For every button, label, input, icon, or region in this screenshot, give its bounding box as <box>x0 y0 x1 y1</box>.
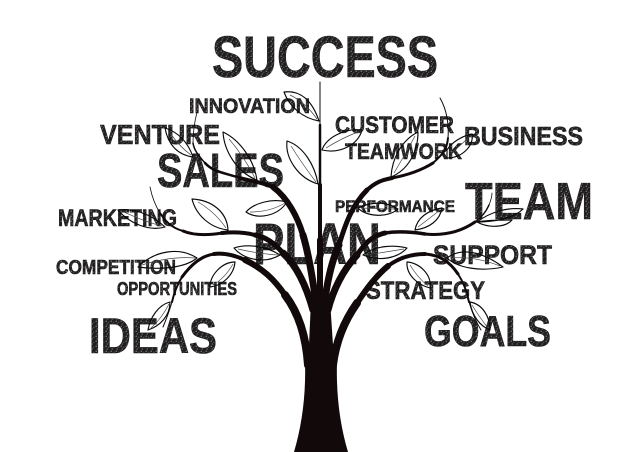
word: MARKETING: MARKETING <box>58 205 177 232</box>
word: INNOVATION: INNOVATION <box>189 95 310 118</box>
word: CUSTOMER: CUSTOMER <box>335 112 454 139</box>
branch: customer <box>324 98 448 310</box>
trunk <box>294 300 348 452</box>
branch: center <box>317 82 323 310</box>
word: BUSINESS: BUSINESS <box>464 121 583 151</box>
word: PERFORMANCE: PERFORMANCE <box>335 197 455 216</box>
branch: team <box>328 193 492 310</box>
leaves <box>118 92 523 330</box>
tree <box>118 82 523 452</box>
word: SUPPORT: SUPPORT <box>433 240 552 270</box>
word: TEAM: TEAM <box>465 173 593 231</box>
branch: lower left <box>163 254 308 365</box>
word: TEAMWORK: TEAMWORK <box>345 139 462 164</box>
word: STRATEGY: STRATEGY <box>366 277 485 305</box>
word: COMPETITION: COMPETITION <box>56 257 176 279</box>
word: IDEAS: IDEAS <box>89 308 217 364</box>
branch: lower right <box>333 254 481 365</box>
branch: marketing <box>150 187 313 310</box>
word: SALES: SALES <box>157 145 284 198</box>
word: GOALS: GOALS <box>424 307 551 356</box>
word: VENTURE: VENTURE <box>100 119 220 150</box>
word: SUCCESS: SUCCESS <box>212 25 438 90</box>
branch: sales <box>193 112 317 310</box>
word: OPPORTUNITIES: OPPORTUNITIES <box>117 279 237 299</box>
word: PLAN: PLAN <box>253 212 381 277</box>
